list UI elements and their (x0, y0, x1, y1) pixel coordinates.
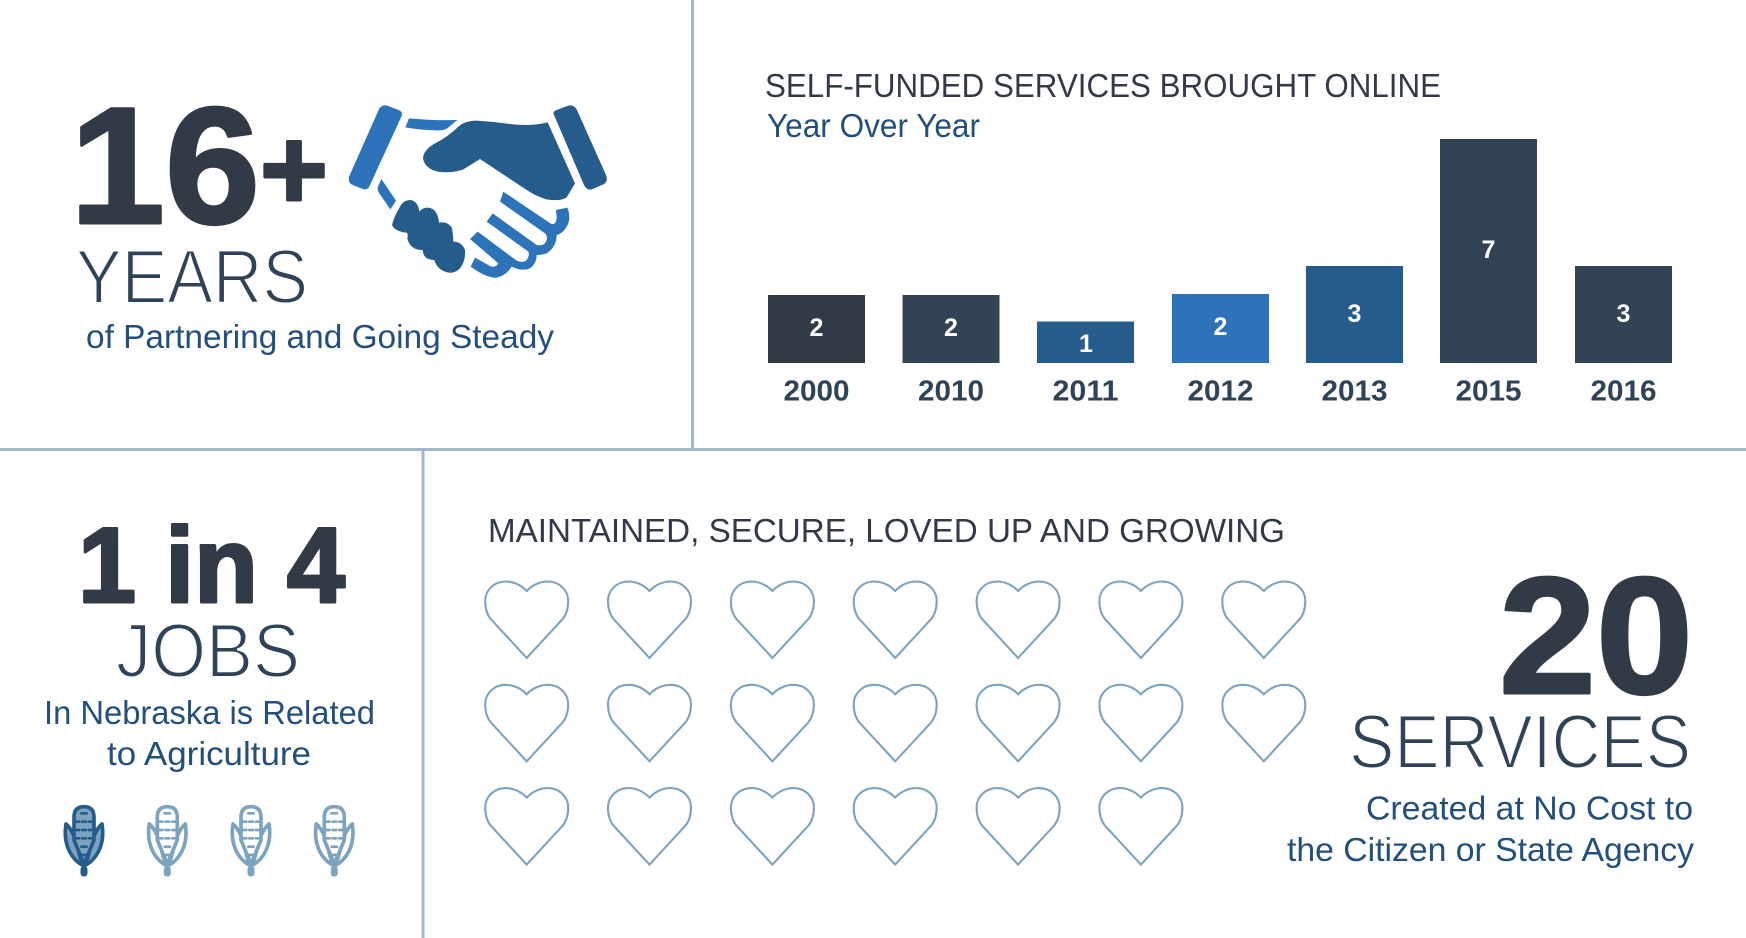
heading: YEARS: YEARS (76, 235, 308, 320)
bar: 2013: 3 (1348, 300, 1361, 328)
bar: 2010 (902, 295, 1000, 408)
panel: years partnering (70, 74, 607, 355)
text: created at no cost: Created at No Cost to (1366, 790, 1693, 826)
bar: 2015: 2015 (1456, 376, 1522, 408)
bar: 2000: 2000 (784, 376, 850, 408)
bar: 2013: 2013 (1322, 376, 1388, 408)
text: of Partnering and Going Steady: of Partnering and Going Steady (86, 318, 554, 355)
panel: jobs in agriculture (44, 505, 375, 875)
icon: corn outline (316, 807, 353, 875)
bar: 2010: 2010 (918, 376, 984, 408)
bar: 2012: 2012 (1188, 376, 1254, 408)
bar: 2012 (1172, 294, 1269, 408)
bar: 2016: 2016 (1590, 376, 1656, 408)
bar: 2012: 2 (1214, 313, 1227, 341)
bar: 2011 (1037, 322, 1134, 408)
bar: 2000: 2 (810, 314, 823, 342)
stat: 16+: + (260, 106, 328, 234)
text: created at no cost (1287, 790, 1695, 868)
heading: JOBS: JOBS (116, 609, 300, 694)
heading: self-funded services: SELF-FUNDED SERVICES BROUGHT ONLINE (765, 67, 1441, 104)
stat: 1 in 4: 1 in 4 (78, 505, 345, 625)
bar: 2013 (1306, 266, 1403, 408)
text: In Nebraska is Related to Agriculture: to Agriculture (107, 735, 311, 772)
stat: 16+: 16 (70, 74, 260, 259)
bar: 2000 (768, 295, 865, 408)
panel: self-funded services bar chart (765, 67, 1672, 408)
heading: SERVICES: SERVICES (1349, 700, 1691, 785)
text: In Nebraska is Related to Agriculture: In Nebraska is Related (44, 694, 375, 731)
bar: 2011: 2011 (1052, 376, 1118, 408)
bar: 2011: 1 (1079, 330, 1093, 358)
icon: corn outline (149, 807, 186, 875)
panel: services maintained (485, 512, 1695, 868)
heading: maintained secure loved up and growing: MAINTAINED, SECURE, LOVED UP AND GROWING (488, 512, 1285, 549)
icon grid: twenty hearts (485, 582, 1305, 865)
icon: corn outline (232, 807, 270, 875)
bar: 2010: 2 (944, 314, 958, 342)
text: created at no cost: the Citizen or State Agency (1287, 831, 1695, 868)
icon: handshake (349, 105, 607, 278)
bar: 2015: 7 (1482, 236, 1495, 264)
text: In Nebraska is Related to Agriculture (44, 694, 375, 772)
bar: 2015 (1440, 139, 1537, 408)
stat: 20: 20 (1499, 544, 1693, 729)
subheading: year over year: Year Over Year (767, 107, 980, 144)
bar: 2016 (1575, 266, 1672, 408)
bar: 2016: 3 (1617, 300, 1630, 328)
icon: corn filled (65, 807, 103, 875)
